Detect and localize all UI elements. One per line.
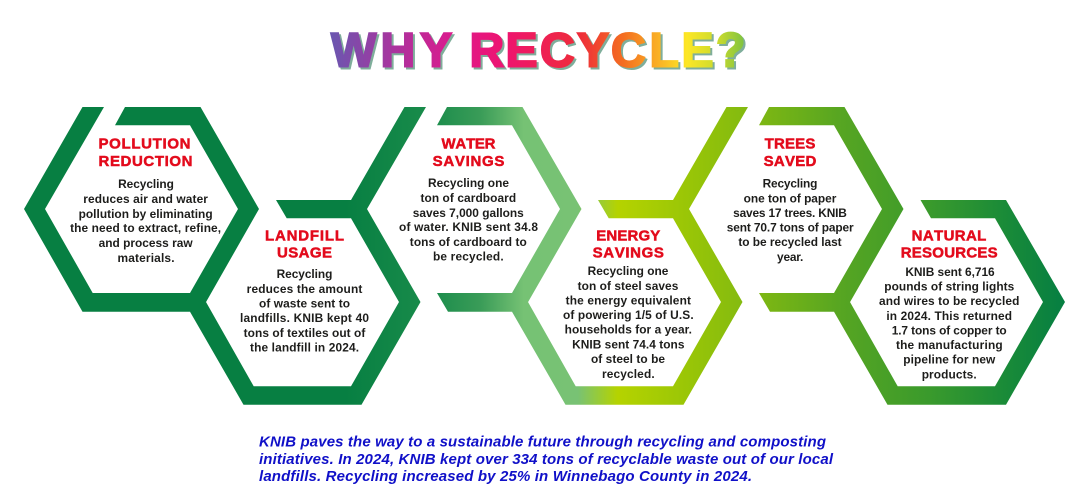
title: WHY RECYCLE? xyxy=(331,24,745,78)
text: pollution reduction: the need to extract, refine, xyxy=(70,221,221,235)
footer statement xyxy=(259,434,834,485)
text: natural resources: pounds of string lights xyxy=(884,280,1015,294)
text: energy savings: the energy equivalent xyxy=(566,293,691,307)
heading: landfill usage: USAGE xyxy=(277,245,332,262)
text: pollution reduction: pollution by eliminating xyxy=(79,207,213,221)
heading: pollution reduction: REDUCTION xyxy=(98,153,192,170)
heading: natural resources: RESOURCES xyxy=(901,245,998,262)
text: natural resources: in 2024. This returned xyxy=(886,309,1012,323)
text: natural resources: and wires to be recycled xyxy=(879,294,1019,308)
text: water savings: of water. KNIB sent 34.8 xyxy=(399,220,538,234)
hexagon frame: pollution reduction xyxy=(24,107,259,312)
text: natural resources: the manufacturing xyxy=(896,338,1003,352)
text: water savings: Recycling one xyxy=(428,176,509,190)
text: pollution reduction: materials. xyxy=(118,251,174,265)
text: natural resources: products. xyxy=(922,368,977,382)
heading: water savings: WATER xyxy=(442,136,496,153)
heading: water savings xyxy=(433,136,504,170)
heading: energy savings: ENERGY xyxy=(596,228,660,245)
hexagon frame: water savings xyxy=(437,107,582,312)
panel: water savings xyxy=(399,107,582,312)
text: trees saved: saves 17 trees. KNIB xyxy=(733,206,847,220)
hexagon frame: trees saved xyxy=(759,107,904,312)
heading: trees saved: SAVED xyxy=(764,153,817,170)
footer statement: initiatives. In 2024, KNIB kept over 334 tons of recyclable waste out of our local xyxy=(259,451,834,468)
hexagon frame: natural resources xyxy=(834,200,1065,405)
heading: trees saved xyxy=(764,136,817,170)
text: pollution reduction: and process raw xyxy=(99,236,193,250)
text: trees saved: to be recycled last xyxy=(738,235,842,249)
text: water savings: tons of cardboard to xyxy=(410,235,527,249)
text: pollution reduction: Recycling xyxy=(118,177,174,191)
text: trees saved: one ton of paper xyxy=(744,192,837,206)
text: landfill usage: the landfill in 2024. xyxy=(250,340,359,354)
heading: natural resources xyxy=(901,228,998,262)
text: energy savings: Recycling one xyxy=(588,264,669,278)
text: pollution reduction xyxy=(70,177,221,265)
text: landfill usage: of waste sent to xyxy=(259,296,350,310)
heading: energy savings: SAVINGS xyxy=(593,245,664,262)
footer statement: KNIB paves the way to a sustainable future through recycling and composting xyxy=(259,434,826,451)
heading: pollution reduction xyxy=(98,136,192,170)
text: water savings: be recycled. xyxy=(433,250,504,264)
text: energy savings: households for a year. xyxy=(565,322,692,336)
text: energy savings: KNIB sent 74.4 tons xyxy=(572,337,685,351)
text: trees saved: sent 70.7 tons of paper xyxy=(727,220,854,234)
text: landfill usage: Recycling xyxy=(277,267,332,281)
heading: natural resources: NATURAL xyxy=(912,228,986,245)
text: water savings: ton of cardboard xyxy=(420,191,516,205)
text: trees saved xyxy=(727,177,854,264)
heading: pollution reduction: POLLUTION xyxy=(98,136,190,153)
panel: pollution reduction xyxy=(24,107,259,312)
panel: landfill usage xyxy=(190,107,426,405)
panel: trees saved xyxy=(727,107,904,312)
text: water savings xyxy=(399,176,538,264)
text: natural resources: 1.7 tons of copper to xyxy=(892,324,1007,338)
text: natural resources: KNIB sent 6,716 xyxy=(905,265,995,279)
heading: energy savings xyxy=(593,228,664,262)
text: water savings: saves 7,000 gallons xyxy=(413,206,524,220)
text: energy savings: ton of steel saves xyxy=(578,279,679,293)
text: energy savings: recycled. xyxy=(602,367,655,381)
hexagon frame: energy savings xyxy=(512,107,748,405)
text: trees saved: Recycling xyxy=(763,177,817,191)
text: pollution reduction: reduces air and water xyxy=(83,192,208,206)
text: energy savings: of powering 1/5 of U.S. xyxy=(563,308,694,322)
heading: trees saved: TREES xyxy=(765,136,815,153)
panel: energy savings xyxy=(512,107,748,405)
text: natural resources: pipeline for new xyxy=(903,352,996,366)
hexagon frame: landfill usage xyxy=(190,107,426,405)
text: energy savings xyxy=(563,264,694,381)
heading: landfill usage xyxy=(265,228,344,262)
heading: water savings: SAVINGS xyxy=(433,153,504,170)
text: landfill usage: reduces the amount xyxy=(247,282,362,296)
panel: natural resources xyxy=(834,200,1065,405)
text: landfill usage: tons of textiles out of xyxy=(244,326,365,340)
heading: landfill usage: LANDFILL xyxy=(265,228,344,245)
text: energy savings: of steel to be xyxy=(591,352,665,366)
text: trees saved: year. xyxy=(777,250,803,264)
text: landfill usage xyxy=(240,267,369,354)
footer statement: landfills. Recycling increased by 25% in Winnebago County in 2024. xyxy=(259,468,752,485)
text: landfill usage: landfills. KNIB kept 40 xyxy=(240,311,369,325)
text: natural resources xyxy=(879,265,1019,382)
